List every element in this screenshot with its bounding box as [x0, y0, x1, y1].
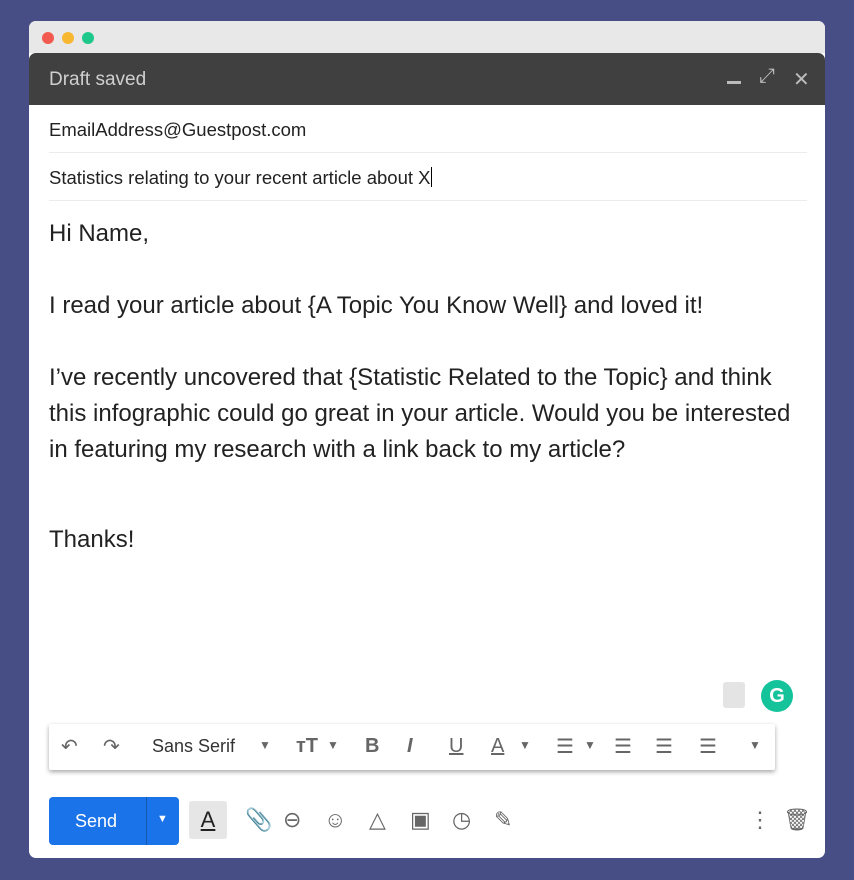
formatting toolbar: Sans Serif [152, 736, 235, 756]
bottom action icons: ▣ [410, 807, 431, 832]
header controls: ⤢ [759, 65, 775, 87]
bottom action icons: △ [369, 807, 386, 832]
formatting toolbar: ▼ [327, 738, 339, 752]
formatting toolbar: A [491, 735, 504, 757]
header title: Draft saved [49, 69, 146, 90]
bottom action icons: 🗑 [783, 807, 811, 832]
bottom action icons: ⋮ [749, 807, 771, 832]
subject field: Statistics relating to your recent article about X [49, 167, 430, 188]
formatting toolbar: ▼ [259, 738, 271, 752]
formatting toolbar: B [365, 735, 379, 757]
icon: grammarly [761, 680, 793, 712]
send button: Send [75, 811, 117, 831]
bottom action icons [189, 801, 811, 839]
bottom action icons: ☺ [324, 807, 346, 832]
icon: grammarly: G [769, 685, 785, 707]
email body: I read your article about {A Topic You Know Well} and loved it! [49, 292, 703, 319]
formatting toolbar: ☰ [655, 736, 673, 758]
email body: this infographic could go great in your article. Would you be interested [49, 400, 790, 427]
bottom action icons: A [201, 807, 215, 832]
formatting toolbar: ☰ [556, 736, 574, 758]
formatting toolbar [49, 724, 775, 770]
formatting toolbar: ▼ [584, 738, 596, 752]
email body: Thanks! [49, 526, 134, 553]
header controls [727, 65, 810, 91]
window dots [42, 32, 94, 44]
email body: in featuring my research with a link back to my article? [49, 436, 625, 463]
icon: extension shirt [723, 682, 745, 708]
formatting toolbar: ↷ [103, 736, 120, 758]
formatting toolbar: ▼ [749, 738, 761, 752]
formatting toolbar: U [449, 735, 463, 757]
bottom action icons: ✎ [494, 807, 512, 832]
compose header [29, 53, 825, 105]
bottom action icons: ⊖ [283, 807, 301, 832]
formatting toolbar: I [407, 735, 413, 757]
formatting toolbar: тT [296, 735, 318, 757]
title bar [29, 21, 825, 53]
send button [49, 797, 179, 845]
bottom action icons: 📎 [245, 807, 272, 832]
formatting toolbar: ☰ [614, 736, 632, 758]
email body: Hi Name, [49, 220, 149, 247]
recipient field: EmailAddress@Guestpost.com [49, 119, 306, 140]
send button: ▼ [157, 813, 168, 825]
header controls: ✕ [793, 69, 810, 91]
bottom action icons: ◷ [452, 807, 471, 832]
email body: I’ve recently uncovered that {Statistic Related to the Topic} and think [49, 364, 772, 391]
email body [49, 220, 790, 553]
formatting toolbar: ↶ [61, 736, 78, 758]
formatting toolbar: ▼ [519, 738, 531, 752]
formatting toolbar: ☰ [699, 736, 717, 758]
